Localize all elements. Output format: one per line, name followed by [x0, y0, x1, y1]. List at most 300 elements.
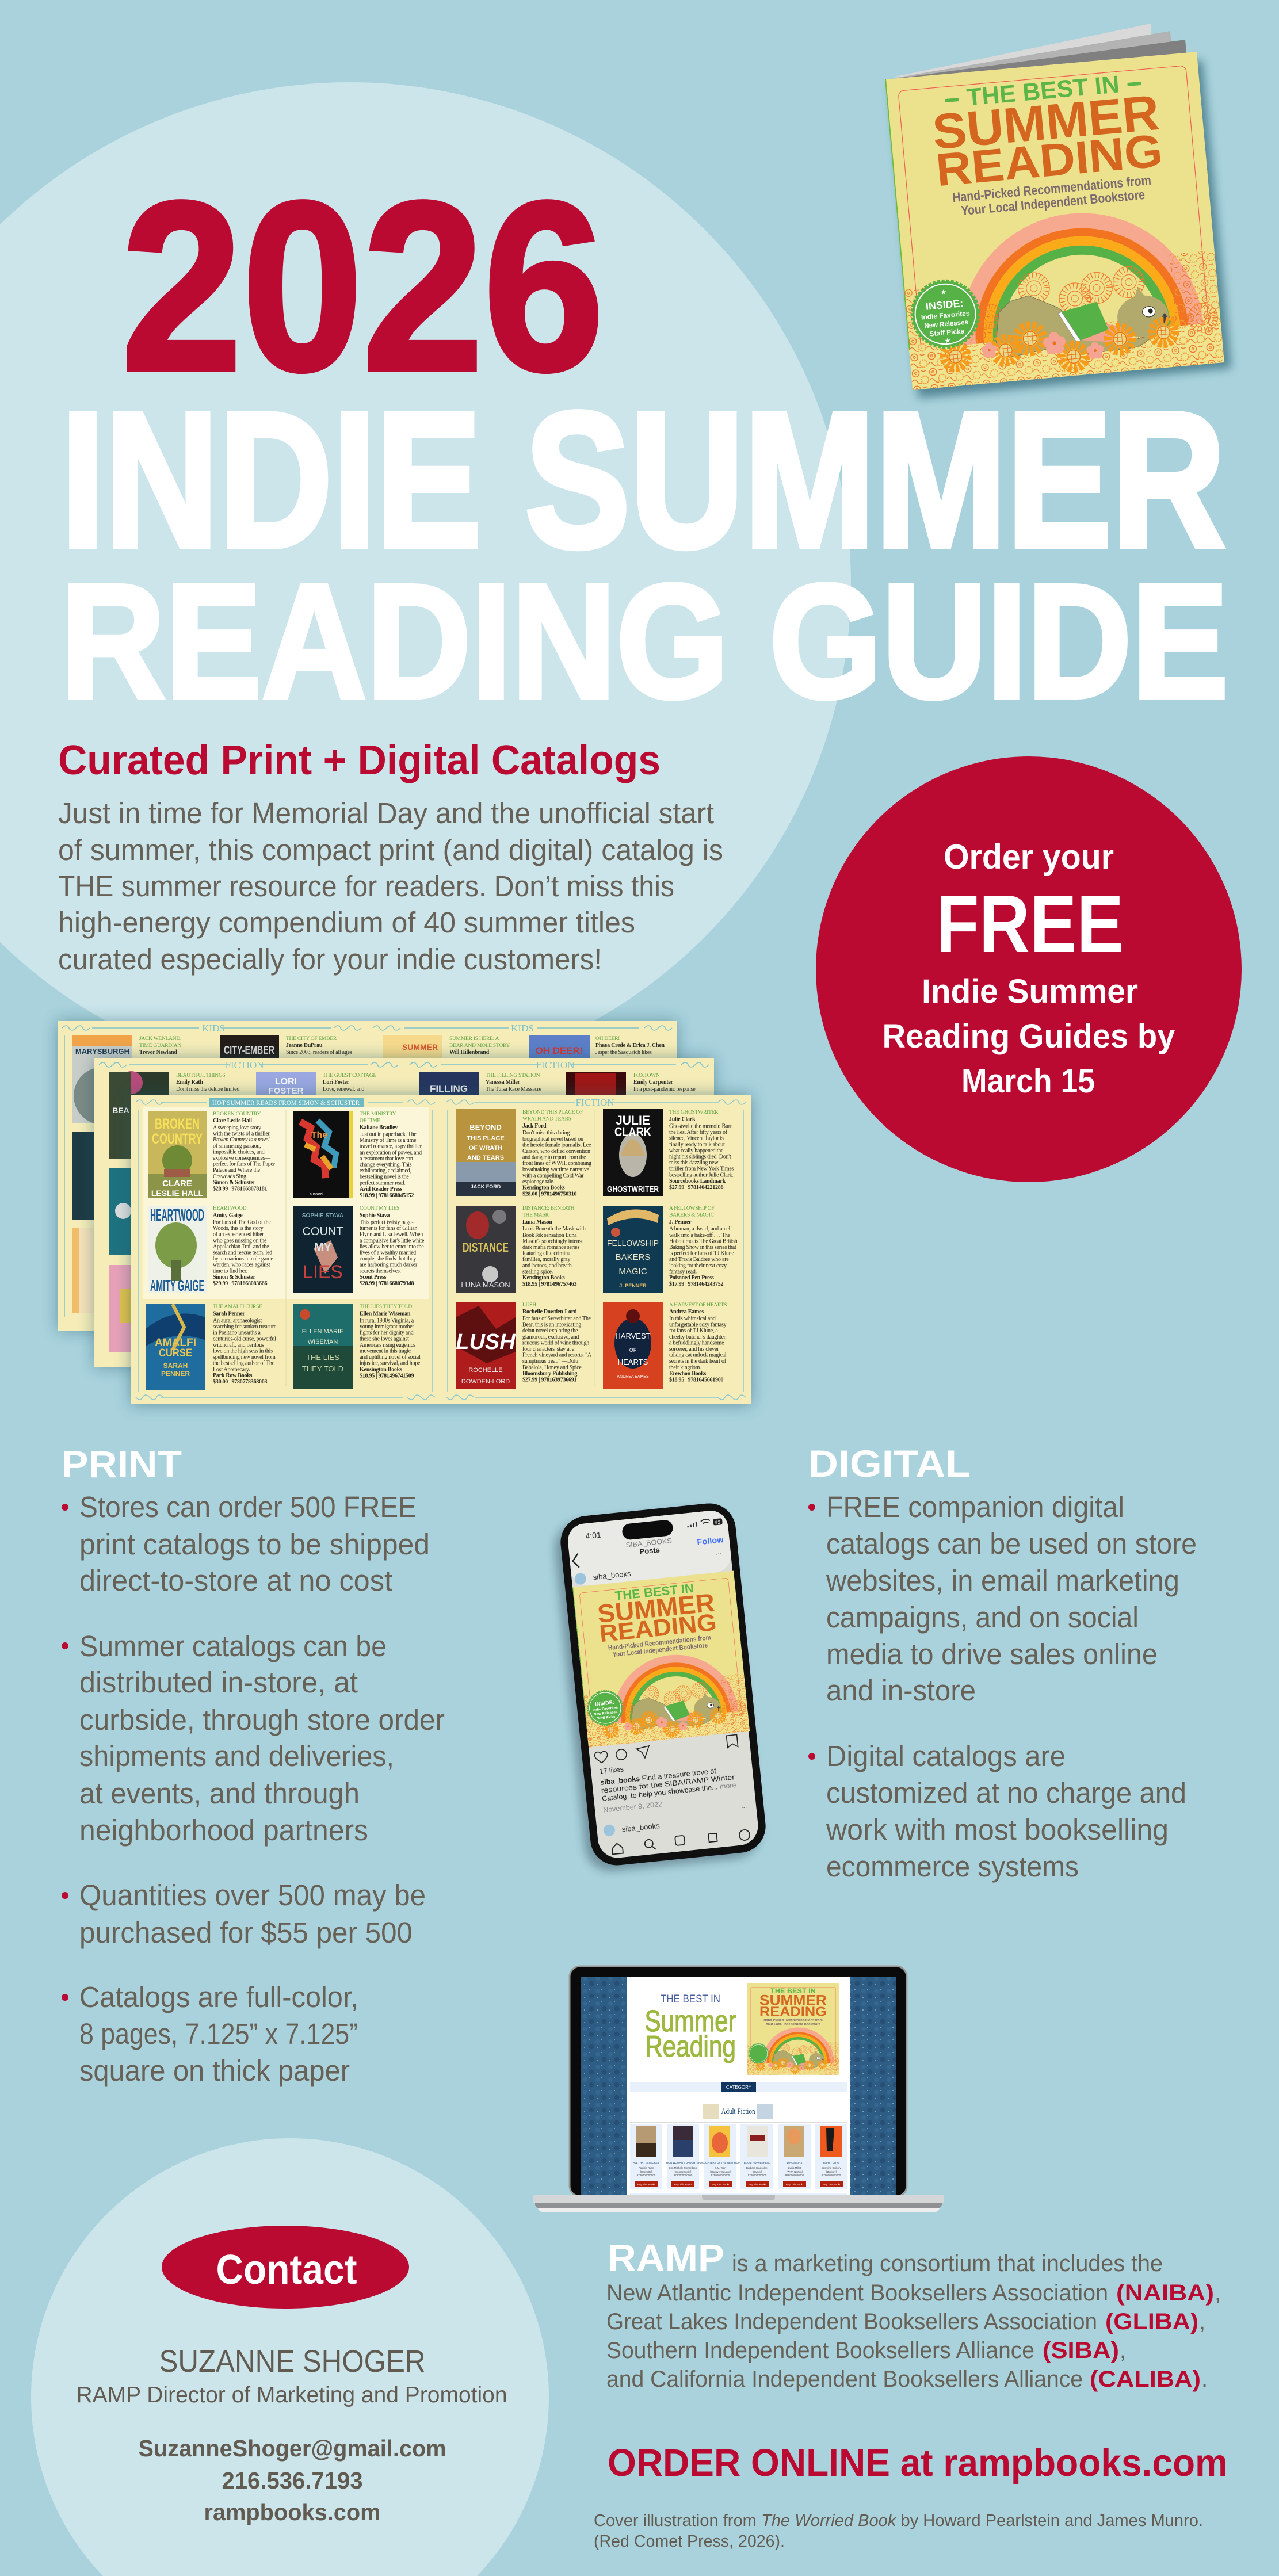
- middle spread: fiction: BEA: [112, 1106, 129, 1115]
- catalog listings: Scout Press: [360, 1274, 387, 1281]
- print bullets: curbside, through store order: [79, 1703, 445, 1736]
- web heading: Summer: [644, 2005, 736, 2038]
- post header: [571, 1531, 727, 1585]
- catalog listings: WRATH AND TEARS: [522, 1117, 571, 1122]
- catalog listings: finally ready to talk about: [669, 1141, 725, 1148]
- book cover: A Fellowship of Bakers & Magic: [603, 1206, 663, 1293]
- web heading: Reading: [645, 2030, 736, 2063]
- post caption: [599, 1754, 738, 1814]
- book front cover: Hand-Picked Recommendations from: [952, 173, 1152, 205]
- catalog listings: in Positano unearths a: [213, 1330, 261, 1336]
- book cover: The Ghostwriter: JULIE: [616, 1113, 650, 1128]
- catalog listings: espionage tale.: [522, 1179, 555, 1185]
- post header: Posts: [639, 1545, 661, 1556]
- book cover: Count My Lies: LIES: [303, 1262, 343, 1282]
- catalog listings: miss this dazzling new: [669, 1160, 719, 1166]
- laptop base: [533, 2195, 944, 2212]
- order callout circle: Reading Guides by: [883, 1018, 1175, 1055]
- catalog listings: perfect for fans of The Paper: [213, 1161, 276, 1168]
- status bar: [585, 1518, 723, 1541]
- catalog listings: Kensington Books: [360, 1366, 402, 1373]
- digital bullets: FREE companion digital: [826, 1490, 1124, 1523]
- catalog listings: $18.95 | 9781645661900: [669, 1377, 723, 1383]
- catalog listings: bestselling novel is the: [360, 1174, 409, 1180]
- book cover: A Harvest of Hearts: HEARTS: [618, 1358, 648, 1366]
- catalog listings: Mason's scorchingly intense: [522, 1238, 584, 1244]
- catalog listings: the lies. After fifty years of: [669, 1129, 728, 1136]
- light circle behind title: [0, 82, 851, 1084]
- book front cover: Your Local Independent Bookstore: [960, 187, 1146, 218]
- catalog listings: a compulsive liar's little white: [360, 1237, 425, 1244]
- catalog listings: explosive consequences—: [213, 1155, 271, 1161]
- catalog listings: Kaliane Bradley: [360, 1124, 398, 1131]
- catalog listings: Avid Reader Press: [360, 1186, 402, 1193]
- phone screen: [566, 1509, 760, 1860]
- catalog listings: the bestselling author of The: [213, 1360, 275, 1367]
- print bullets: Summer catalogs can be: [79, 1630, 387, 1662]
- digital bullets: and in-store: [826, 1674, 976, 1707]
- catalog listings: with the twists of a thriller,: [213, 1131, 270, 1137]
- digital bullets: websites, in email marketing: [826, 1564, 1179, 1597]
- catalog listings: HEARTWOOD: [213, 1206, 247, 1211]
- catalog listings: fights for her dignity and: [360, 1330, 414, 1336]
- digital bullets: [808, 1490, 1197, 1883]
- catalog listings: secrets in the dark heart of: [669, 1358, 727, 1365]
- year heading: 2026: [121, 152, 604, 421]
- middle spread: fiction: In a post-pandemic response: [633, 1086, 696, 1092]
- catalog listings: $30.00 | 9780778368003: [213, 1379, 267, 1385]
- print heading: PRINT: [62, 1443, 182, 1485]
- catalog listings: bestselling author Julie Clark.: [669, 1172, 734, 1178]
- back spread: kids: [58, 1021, 677, 1331]
- phone mockup: [552, 1501, 768, 1874]
- book cover: Count My Lies: MY: [314, 1241, 332, 1254]
- RAMP description: [606, 2237, 1221, 2392]
- catalog listings: $18.95 | 9781496741509: [360, 1373, 414, 1379]
- middle spread: fiction: Emily Rath: [176, 1079, 203, 1086]
- book cover: A Fellowship of Bakers & Magic: J. PENNER: [619, 1283, 647, 1289]
- intro paragraph: [58, 797, 723, 976]
- status bar: 92: [715, 1519, 721, 1525]
- catalog listings: An aural archaeologist: [213, 1317, 262, 1324]
- book cards: Buy This Book!: [637, 2183, 655, 2186]
- back pages: [893, 24, 1186, 81]
- middle spread: fiction: Emily Carpenter: [633, 1079, 674, 1086]
- order callout circle: March 15: [961, 1062, 1095, 1100]
- book cover: Broken Country: [148, 1111, 207, 1198]
- print bullets: shipments and deliveries,: [79, 1740, 394, 1772]
- book cover: Count My Lies: COUNT: [302, 1225, 343, 1238]
- print bullets: direct-to-store at no cost: [79, 1564, 392, 1597]
- catalog listings: the heroic female journalist Lee: [522, 1142, 591, 1148]
- digital bullets: customized at no charge and: [826, 1776, 1186, 1809]
- digital heading: DIGITAL: [808, 1442, 971, 1485]
- cover credit: Cover illustration from The Worried Book by Howard Pearlstein and James Munro.: [594, 2512, 1203, 2530]
- book cards: Buy This Book!: [674, 2183, 692, 2186]
- catalog listings: A HARVEST OF HEARTS: [669, 1302, 727, 1308]
- back spread: kids: OH DEER!: [535, 1045, 583, 1056]
- book cards: [Hachette]: [640, 2170, 652, 2173]
- catalog listings: centuries-old curse, powerful: [213, 1336, 276, 1342]
- denim side panels: [581, 1977, 896, 2195]
- catalog listings: $29.99 | 9781668083666: [213, 1281, 267, 1287]
- catalog listings: Woods, this is the story: [213, 1225, 264, 1232]
- catalog listings: $17.99 | 9781464243752: [669, 1281, 723, 1287]
- catalog listings: THE LIES THEY TOLD: [360, 1304, 412, 1310]
- catalog listings: perfect summer read.: [360, 1180, 406, 1186]
- book cover: The Lies They Told: THEY TOLD: [302, 1365, 343, 1373]
- catalog listings: of simmering passion,: [213, 1143, 261, 1149]
- catalog listings: Sarah Penner: [213, 1310, 245, 1317]
- book front cover: SUMMER: [930, 85, 1162, 160]
- middle spread: fiction: FOXTOWN: [633, 1073, 660, 1079]
- back spread: kids: CITY-EMBER: [224, 1044, 274, 1057]
- book cards: Buy This Book!: [749, 2183, 766, 2186]
- catalog listings: young immigrant mother: [360, 1324, 414, 1330]
- middle spread: fiction: BEAUTIFUL THINGS: [176, 1073, 225, 1079]
- book front cover: ★: [944, 337, 951, 345]
- web cover image: Hand-Picked Recommendations from: [763, 2018, 823, 2022]
- book cover: The Amalfi Curse: PENNER: [161, 1370, 190, 1378]
- catalog listings: talking cat unlock magical: [669, 1352, 727, 1359]
- book cover: Count My Lies: SOPHIE STAVA: [302, 1213, 343, 1219]
- middle spread: fiction: THE GUEST COTTAGE: [323, 1073, 376, 1079]
- catalog listings: COUNT MY LIES: [360, 1206, 399, 1211]
- book front cover: INSIDE:: [925, 297, 964, 312]
- book cards: ALL THAT IS SECRET: [633, 2161, 659, 2164]
- book cover: Beyond This Place: AND TEARS: [467, 1155, 504, 1161]
- post header: siba_books: [593, 1569, 632, 1581]
- catalog listings: OF TIME: [360, 1118, 380, 1124]
- book cards: E.M. Tran: [715, 2166, 726, 2169]
- book cover: Beyond This Place: JACK FORD: [471, 1184, 501, 1190]
- catalog listings: sorcerer, and his clever: [669, 1346, 719, 1352]
- contact details: 216.536.7193: [222, 2467, 362, 2494]
- book cards: IRON WOMAN'S DAUGHTER: [666, 2161, 701, 2164]
- catalog listings: search and rescue team, led: [213, 1249, 272, 1256]
- catalog listings: Simon & Schuster: [213, 1274, 256, 1281]
- post actions: [594, 1734, 738, 1764]
- digital bullets: work with most bookselling: [826, 1813, 1169, 1846]
- back spread: kids: BEAR AND MOLE STORY: [449, 1043, 510, 1049]
- order callout circle: [816, 756, 1242, 1182]
- catalog listings: $28.00 | 9781496750310: [522, 1191, 576, 1198]
- back spread: kids: MARYSBURGH: [75, 1047, 129, 1056]
- catalog listings: Hobbit meets The Great British: [669, 1238, 738, 1244]
- middle spread: fiction: THE FILLING STATION: [486, 1073, 540, 1079]
- adult fiction heading: Adult Fiction: [721, 2107, 755, 2116]
- book cover: Count My Lies: [293, 1206, 353, 1293]
- web cover image: Your Local Independent Bookstore: [766, 2022, 820, 2026]
- book cover: The Ghostwriter: GHOSTWRITER: [607, 1184, 659, 1194]
- catalog listings: stealing spice.: [522, 1268, 553, 1275]
- book cover: The Ministry of Time: The: [311, 1130, 327, 1140]
- RAMP description: New Atlantic Independent Booksellers Association: [606, 2280, 1108, 2306]
- catalog listings: Babalola, Honey and Spice: [522, 1365, 582, 1371]
- catalog listings: Baking Show in this series that: [669, 1244, 736, 1251]
- book cards: Patricia Ryan: [639, 2166, 654, 2169]
- catalog listings: $18.95 | 9781496757463: [522, 1281, 576, 1287]
- catalog listings: by a tenacious female game: [213, 1256, 273, 1262]
- book cover: Heartwood: HEARTWOOD: [150, 1206, 204, 1225]
- catalog listings: French vineyard and resorts. "A: [522, 1352, 592, 1359]
- book cover: The Ministry of Time: a novel: [310, 1193, 323, 1197]
- middle spread: fiction: Vanessa Miller: [486, 1079, 521, 1086]
- digital bullets: catalogs can be used on store: [826, 1527, 1197, 1560]
- middle spread: fiction: LORI: [275, 1077, 297, 1087]
- book cards: 9780000000000: [674, 2174, 693, 2177]
- catalog listings: Julie Clark: [669, 1116, 696, 1123]
- contact name: SUZANNE SHOGER: [159, 2344, 426, 2379]
- book cover: A Fellowship of Bakers & Magic: FELLOWSHIP: [607, 1239, 659, 1248]
- RAMP description: (SIBA): [1043, 2338, 1119, 2363]
- catalog listings: Look Beneath the Mask with: [522, 1226, 586, 1232]
- catalog listings: Palace and Where the: [213, 1167, 261, 1174]
- catalog listings: featuring elite criminal: [522, 1251, 572, 1257]
- back spread: kids: Since 2003, readers of all ages: [286, 1049, 352, 1056]
- catalog listings: This perfect twisty page-: [360, 1220, 413, 1225]
- catalog listings: In this whimsical and: [669, 1316, 716, 1322]
- catalog listings: anti-heroes, and breath-: [522, 1263, 574, 1269]
- web cover image: [747, 1983, 839, 2096]
- catalog listings: are harboring much darker: [360, 1262, 418, 1268]
- highlighted panel: [143, 1107, 429, 1299]
- catalog listings: fantasy read.: [669, 1268, 697, 1275]
- catalog listings: families, morally gray: [522, 1256, 570, 1263]
- cover credit: (Red Comet Press, 2026).: [594, 2532, 785, 2551]
- catalog listings: THE AMALFI CURSE: [213, 1304, 262, 1310]
- category bar: CATEGORY: [726, 2085, 752, 2090]
- catalog listings: silence, Vincent Taylor is: [669, 1136, 724, 1142]
- catalog listings: In rural 1930s Virginia, a: [360, 1317, 414, 1324]
- light circle behind contact: [31, 2138, 549, 2576]
- book cover: A Fellowship of Bakers & Magic: MAGIC: [618, 1267, 647, 1276]
- catalog listings: cheeky butcher's daughter,: [669, 1334, 727, 1340]
- post image: catalog cover: Staff Picks: [597, 1715, 616, 1721]
- back spread: kids: OH DEER!: [595, 1036, 620, 1042]
- middle spread: fiction: Don't miss the deluxe limited: [176, 1086, 239, 1092]
- book cover: The Ministry of Time: [293, 1111, 353, 1198]
- book cards: Jasmine Guillory: [822, 2166, 841, 2169]
- book cover: Broken Country: LESLIE HALL: [151, 1188, 204, 1198]
- intro paragraph: high-energy compendium of 40 summer titles: [58, 906, 635, 939]
- category bar: [630, 2082, 847, 2092]
- back spread: kids: Will Hillenbrand: [449, 1049, 490, 1056]
- catalog listings: Clare Leslie Hall: [213, 1118, 252, 1124]
- book cover: Beyond This Place: BEYOND: [469, 1123, 502, 1132]
- catalog listings: Andrea Eames: [669, 1309, 704, 1315]
- back spread: kids: Phaea Crede & Erica J. Chen: [595, 1042, 665, 1049]
- catalog listings: Just out in paperback, The: [360, 1131, 417, 1138]
- book front cover: [885, 52, 1231, 463]
- catalog listings: and Travis Baldree who are: [669, 1256, 729, 1263]
- RAMP description: Great Lakes Independent Booksellers Association: [606, 2309, 1097, 2334]
- catalog listings: impossible choices, and: [213, 1149, 265, 1155]
- catalog listings: Poisoned Pen Press: [669, 1275, 714, 1281]
- book cover: Lush: DOWDEN-LORD: [461, 1378, 510, 1385]
- subheading: Curated Print + Digital Catalogs: [58, 737, 661, 783]
- post image: catalog cover: Hand-Picked Recommendations from: [608, 1633, 711, 1652]
- print bullets: Catalogs are full-color,: [79, 1981, 358, 2013]
- order callout circle: Indie Summer: [922, 973, 1138, 1010]
- book cover: A Fellowship of Bakers & Magic: BAKERS: [616, 1252, 650, 1262]
- book cover: The Lies They Told: WISEMAN: [308, 1339, 338, 1346]
- book front cover: Indie Favorites: [921, 309, 970, 322]
- RAMP description: ,: [1215, 2280, 1221, 2306]
- phone body: [558, 1501, 768, 1868]
- catalog listings: a befuddlingly handsome: [669, 1340, 724, 1346]
- book front cover: ★: [940, 288, 947, 296]
- book cards: 9780000000000: [711, 2174, 730, 2177]
- contact details: SuzanneShoger@gmail.com: [138, 2435, 446, 2462]
- post image: catalog cover: THE BEST IN: [614, 1581, 694, 1603]
- book cards: [630, 2124, 847, 2189]
- book cover: The Lies They Told: [293, 1304, 353, 1389]
- intro paragraph: Just in time for Memorial Day and the unofficial start: [58, 797, 714, 830]
- catalog listings: dark mafia romance series: [522, 1244, 579, 1251]
- catalog listings: Don't miss this daring: [522, 1130, 570, 1136]
- book cards: [Sourcebooks]: [675, 2170, 691, 2173]
- catalog listings: Kensington Books: [522, 1275, 565, 1281]
- post caption: resources for the SIBA/RAMP Winter: [601, 1773, 735, 1795]
- catalog listings: secrets themselves.: [360, 1268, 401, 1274]
- digital bullets: media to drive sales online: [826, 1638, 1158, 1671]
- book cards: [Harper]: [753, 2170, 762, 2173]
- print bullets: square on thick paper: [79, 2054, 350, 2087]
- catalog listings: Carson, who defied convention: [522, 1148, 590, 1155]
- order callout circle: FREE: [936, 878, 1124, 970]
- book cover: Lush: [456, 1302, 516, 1389]
- catalog listings: Erewhon Books: [669, 1370, 706, 1377]
- catalog listings: their kingdom.: [669, 1365, 701, 1371]
- catalog listings: THE GHOSTWRITER: [669, 1110, 719, 1115]
- book cards: BOOM HOPPENHEAD: [744, 2161, 771, 2164]
- catalog listings: witchcraft, and perilous: [213, 1342, 264, 1348]
- book cover: Broken Country: COUNTRY: [152, 1131, 203, 1147]
- catalog listings: $18.99 | 9781668045152: [360, 1193, 414, 1199]
- catalog listings: change everything. This: [360, 1162, 412, 1168]
- catalog listings: injustice, survival, and hope.: [360, 1360, 421, 1367]
- catalog listings: breathtaking wartime narrative: [522, 1167, 590, 1173]
- RAMP description: (CALIBA): [1090, 2367, 1201, 2392]
- catalog listings: biographical novel based on: [522, 1136, 583, 1142]
- contact details: rampbooks.com: [204, 2499, 381, 2525]
- book cards: 9780000000000: [785, 2174, 804, 2177]
- back spread: kids: KIDS: [511, 1023, 534, 1034]
- book front cover: THE BEST IN: [965, 70, 1120, 111]
- book cards: DINOSAURS: [787, 2161, 802, 2164]
- middle spread: fiction: FICTION: [536, 1060, 575, 1071]
- catalog listings: Amity Gaige: [213, 1213, 243, 1218]
- print bullets: purchased for $55 per 500: [79, 1916, 413, 1949]
- cover credit: [594, 2512, 1203, 2551]
- book cards: Barbara Kingsolver: [746, 2166, 769, 2169]
- catalog listings: travel romance, a spy thriller,: [360, 1144, 423, 1150]
- catalog listings: time to find her.: [213, 1268, 247, 1274]
- catalog listings: and uplifting novel of social: [360, 1354, 421, 1360]
- catalog listings: THE MASK: [522, 1213, 549, 1218]
- next post row: ...: [740, 1801, 747, 1810]
- book front cover: READING: [934, 125, 1165, 196]
- catalog listings: front lines of WWII, combining: [522, 1160, 591, 1167]
- catalog listings: $27.99 | 9781639736691: [522, 1377, 576, 1383]
- book cards: Buy This Book!: [786, 2183, 803, 2186]
- book cards: Buy This Book!: [823, 2183, 840, 2186]
- book cover: The Ghostwriter: CLARK: [614, 1125, 651, 1139]
- catalog listings: Ellen Marie Wiseman: [360, 1310, 411, 1317]
- post image: catalog cover: Your Local Independent Bookstore: [612, 1641, 708, 1658]
- laptop lid: [570, 1966, 907, 2196]
- post image: catalog cover: SUMMER: [596, 1589, 716, 1629]
- catalog listings: searching for sunken treasure: [213, 1324, 277, 1330]
- catalog listings: lives of a wealthy married: [360, 1249, 416, 1256]
- catalog listings: Lost Apothecary.: [213, 1366, 250, 1373]
- catalog listings: what really happened the: [669, 1148, 724, 1154]
- print bullets: print catalogs to be shipped: [79, 1528, 430, 1561]
- catalog listings: For fans of The God of the: [213, 1220, 271, 1225]
- book cards: 9780000000000: [748, 2174, 767, 2177]
- back spread: kids: THE CITY OF EMBER: [286, 1036, 337, 1042]
- RAMP description: is a marketing consortium that includes the: [732, 2251, 1163, 2276]
- catalog listings: turner is for fans of Gillian: [360, 1225, 417, 1232]
- book cover: The Amalfi Curse: SARAH: [163, 1362, 188, 1370]
- catalog listings: DISTANCE: BENEATH: [522, 1206, 575, 1211]
- back spread: kids: JACK WENLAND,: [139, 1036, 181, 1042]
- front spread: [131, 1095, 751, 1404]
- book cover: The Amalfi Curse: [146, 1304, 205, 1390]
- back spread: kids: Trevor Newland: [139, 1049, 177, 1056]
- book cover: Lush: LUSH: [456, 1330, 516, 1354]
- catalog listings: of an experienced hiker: [213, 1232, 264, 1238]
- intro paragraph: curated especially for your indie customers!: [58, 943, 602, 976]
- book cards: Lydia Millet: [788, 2166, 801, 2169]
- book cover: Beyond This Place: OF WRATH: [469, 1145, 502, 1152]
- catalog listings: Luna Mason: [522, 1219, 552, 1225]
- post image: catalog cover: READING: [598, 1608, 718, 1647]
- status bar: 4:01: [585, 1530, 602, 1541]
- post image: catalog cover: Indie Favorites: [593, 1706, 618, 1712]
- middle spread: fiction: The Tulsa Race Massacre: [486, 1086, 542, 1092]
- catalog listings: glamorous, exclusive, and: [522, 1334, 579, 1340]
- middle spread: fiction: Lori Foster: [323, 1079, 350, 1086]
- digital bullets: Digital catalogs are: [826, 1740, 1066, 1772]
- RAMP description: .: [1201, 2367, 1208, 2392]
- catalog listings: movement in this tragic: [360, 1348, 411, 1354]
- book cover: Heartwood: [148, 1206, 207, 1294]
- catalog listings: four characters' stay at a: [522, 1346, 575, 1352]
- book cover: Lush: ROCHELLE: [468, 1367, 503, 1374]
- book cover: The Lies They Told: ELLEN MARIE: [302, 1328, 343, 1335]
- catalog listings: $27.99 | 9781464221286: [669, 1184, 723, 1191]
- print bullets: at events, and through: [79, 1777, 360, 1810]
- catalog listings: America's rising eugenics: [360, 1342, 415, 1348]
- catalog listings: A human, a dwarf, and an elf: [669, 1226, 732, 1232]
- back spread: kids: SUMMER IS HERE: A: [449, 1036, 499, 1042]
- fiction heading: FICTION: [575, 1097, 614, 1108]
- catalog listings: those she loves against: [360, 1336, 409, 1342]
- book cover: The Ghostwriter: [603, 1109, 663, 1196]
- catalog listings: warden, who races against: [213, 1262, 270, 1268]
- post image: catalog cover: INSIDE:: [595, 1699, 614, 1707]
- RAMP description: Southern Independent Booksellers Alliance: [606, 2338, 1034, 2363]
- catalog listings: Broken Country is a novel: [213, 1137, 270, 1143]
- back spread: kids: Jeanne DuPrau: [286, 1042, 323, 1049]
- RAMP description: ,: [1199, 2309, 1205, 2334]
- book shadow: [891, 60, 1231, 398]
- catalog listings: A sweeping love story: [213, 1125, 261, 1131]
- catalog listings: thriller from New York Times: [669, 1166, 734, 1172]
- catalog listings: with a compelling Cold War: [522, 1172, 584, 1179]
